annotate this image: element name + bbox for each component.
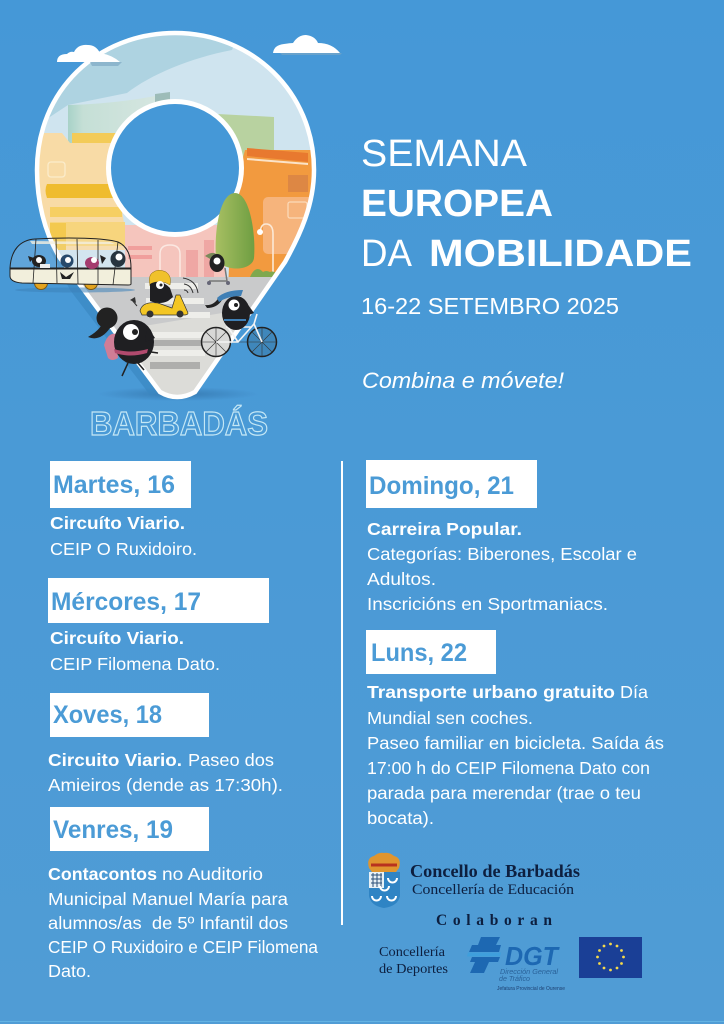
sponsor: Concello de Barbadás: Concellería de Educación xyxy=(412,882,575,898)
panel: Xoves 18 xyxy=(48,693,283,795)
panel: Domingo 21: Categorías: Biberones, Escolar e xyxy=(367,544,637,564)
slogan: Combina e móvete! xyxy=(362,368,564,393)
panel: Venres 19: Municipal Manuel María para xyxy=(48,889,288,909)
title xyxy=(361,133,692,275)
icon: person on kick scooter xyxy=(205,253,230,285)
sponsor: Concellería de Deportes: Concellería xyxy=(379,945,446,960)
icon: scooter rider xyxy=(130,270,198,318)
panel: Domingo 21: Carreira Popular. xyxy=(367,519,522,539)
title: EUROPEA xyxy=(361,183,553,225)
panel: Domingo 21: Adultos. xyxy=(367,569,436,589)
panel: Mércores 17: CEIP Filomena Dato. xyxy=(50,654,220,674)
icon: Barbadás coat of arms xyxy=(368,853,400,908)
panel: Luns 22: 17:00 h do CEIP Filomena Dato con xyxy=(367,758,650,778)
logo: DGT: Dirección General xyxy=(500,967,558,976)
sponsor: Concellería de Deportes xyxy=(379,945,448,977)
icon: bus xyxy=(10,238,135,292)
divider xyxy=(341,461,343,925)
panel: Martes 16: Martes, 16 xyxy=(53,471,175,499)
panel: Martes 16 xyxy=(50,461,197,559)
panel: Luns 22: Paseo familiar en bicicleta. Saída ás xyxy=(367,733,664,753)
panel: Venres 19: alumnos/as de 5º Infantil dos xyxy=(48,913,288,933)
icon: tree xyxy=(216,193,254,268)
panel: Luns 22: bocata). xyxy=(367,808,434,828)
logo: DGT xyxy=(467,937,565,992)
logo: DGT: de Tráfico xyxy=(499,974,530,983)
panel: Luns 22: Luns, 22 xyxy=(371,639,467,667)
heading: Colaboran: Colaboran xyxy=(436,912,552,929)
sponsor: Concellería de Deportes: de Deportes xyxy=(379,962,448,977)
panel: Xoves 18: Circuito Viario. xyxy=(48,750,182,770)
place name: BARBADÁS: BARBADÁS xyxy=(90,405,268,442)
panel: Venres 19 xyxy=(48,807,318,981)
date: 16-22 SETEMBRO 2025 xyxy=(361,293,619,319)
icon: running girl xyxy=(88,308,158,376)
panel: Venres 19: Venres, 19 xyxy=(53,816,173,844)
logo: EU flag xyxy=(579,937,642,978)
icon: cyclist xyxy=(202,290,276,356)
panel: Luns 22: Día xyxy=(620,682,648,702)
panel: Venres 19: CEIP O Ruxidoiro e CEIP Filomena xyxy=(48,937,318,957)
panel: Mércores 17: Circuíto Viario. xyxy=(50,628,184,648)
icon: clouds xyxy=(57,35,342,66)
panel: Xoves 18: Xoves, 18 xyxy=(53,701,162,729)
panel: Xoves 18: Paseo dos xyxy=(188,750,274,770)
panel: Venres 19: no Auditorio xyxy=(162,864,263,884)
panel: Martes 16: CEIP O Ruxidoiro. xyxy=(50,539,197,559)
panel: Venres 19: Dato. xyxy=(48,961,91,981)
title: MOBILIDADE xyxy=(429,233,692,275)
title: SEMANA xyxy=(361,133,528,175)
panel: Xoves 18: Amieiros (dende as 17:30h). xyxy=(48,775,283,795)
logo: DGT: DGT xyxy=(505,941,560,971)
panel: Luns 22: parada para merendar (trae o teu xyxy=(367,783,641,803)
panel: Domingo 21 xyxy=(366,460,637,614)
panel: Domingo 21: Domingo, 21 xyxy=(369,472,514,500)
panel: Mércores 17: Mércores, 17 xyxy=(51,588,201,616)
panel: Luns 22: Transporte urbano gratuito xyxy=(367,682,615,702)
panel: Venres 19: Contacontos xyxy=(48,864,157,884)
sponsor: Concello de Barbadás: Concello de Barbadás xyxy=(410,861,580,881)
title: DA xyxy=(361,233,413,275)
panel: Domingo 21: Inscricións en Sportmaniacs. xyxy=(367,594,608,614)
panel: Luns 22: Mundial sen coches. xyxy=(367,708,533,728)
illustration: map pin with city scene xyxy=(10,30,342,402)
panel: Mércores 17 xyxy=(48,578,269,674)
panel: Martes 16: Circuíto Viario. xyxy=(50,513,185,533)
logo: DGT: Jefatura Provincial de Ourense xyxy=(497,986,565,992)
panel: Luns 22 xyxy=(366,630,664,828)
sponsor: Concello de Barbadás xyxy=(410,861,580,898)
